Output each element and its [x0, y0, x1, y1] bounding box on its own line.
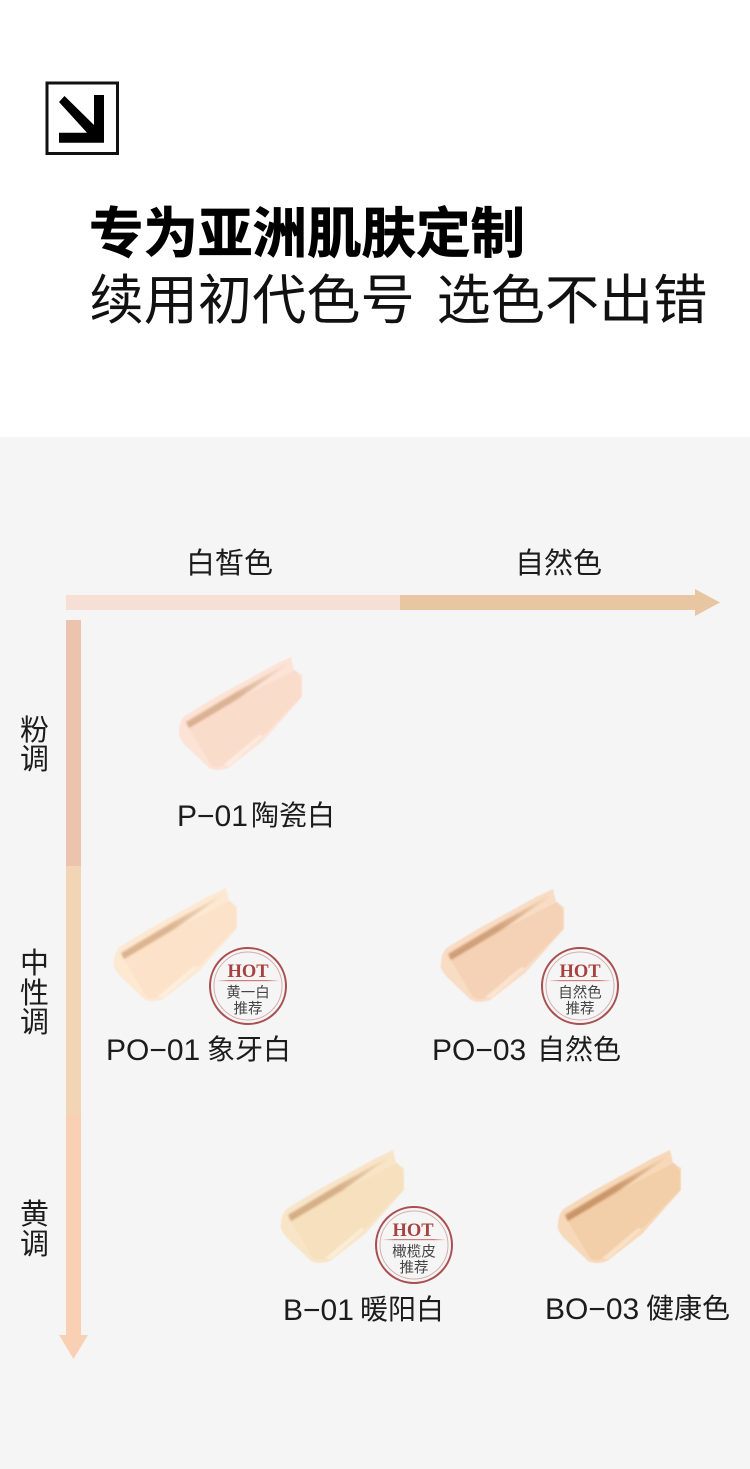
- icon: arrow in square: [47, 83, 118, 154]
- swatch: PO-03: [441, 889, 564, 1002]
- vertical axis label: 中性调: [20, 940, 49, 1041]
- label: B-01暖阳白: B−01: [283, 1294, 354, 1327]
- vertical axis label: 中性调: 性: [20, 970, 49, 1012]
- label: B-01暖阳白: 暖阳白: [360, 1288, 444, 1328]
- badge: HOT 黄一白推荐: 黄一白: [226, 982, 270, 1002]
- badge: HOT 自然色推荐: HOT: [559, 962, 601, 982]
- vertical axis label: 粉调: 调: [20, 736, 49, 778]
- label: BO-03健康色: [545, 1287, 730, 1327]
- badge: HOT 黄一白推荐: 推荐: [234, 998, 262, 1018]
- label: P-01陶瓷白: P−01: [177, 800, 248, 833]
- label: PO-03 自然色: 自然色: [537, 1028, 621, 1068]
- label: PO-01 象牙白: 象牙白: [207, 1028, 291, 1068]
- label: BO-03健康色: 健康色: [646, 1287, 730, 1327]
- badge: HOT 橄榄皮推荐: 橄榄皮: [392, 1240, 436, 1262]
- title: 选色不出错: [436, 256, 707, 335]
- badge: HOT 黄一白推荐: HOT: [227, 962, 269, 982]
- label: PO-01 象牙白: PO−01: [106, 1034, 200, 1067]
- badge: HOT 自然色推荐: 自然色: [558, 982, 602, 1002]
- label: PO-03 自然色: [432, 1028, 621, 1068]
- vertical axis label: 粉调: [20, 707, 49, 778]
- title: [89, 190, 707, 335]
- label: PO-03 自然色: PO−03: [432, 1034, 526, 1067]
- label: PO-01 象牙白: [106, 1028, 291, 1068]
- label: P-01陶瓷白: 陶瓷白: [251, 794, 335, 834]
- label: B-01暖阳白: [283, 1288, 444, 1328]
- vertical axis label: 黄调: [20, 1191, 49, 1263]
- badge: HOT 黄一白推荐: [210, 948, 286, 1024]
- badge: HOT 橄榄皮推荐: 推荐: [400, 1256, 428, 1278]
- title: 专为亚洲肌肤定制: [89, 190, 525, 268]
- label: P-01陶瓷白: [177, 794, 335, 834]
- lower panel background: [0, 437, 750, 1469]
- horizontal axis label: 白皙色: 白皙色: [186, 540, 273, 582]
- arrow: horizontal axis: [66, 589, 720, 616]
- vertical axis label: 中性调: 调: [20, 999, 49, 1041]
- swatch: BO-03: [558, 1150, 681, 1263]
- arrow: vertical axis: [59, 620, 88, 1359]
- badge: HOT 橄榄皮推荐: HOT: [392, 1221, 434, 1241]
- vertical axis label: 粉调: 粉: [20, 707, 49, 749]
- vertical axis label: 黄调: 黄: [20, 1191, 49, 1233]
- badge: HOT 橄榄皮推荐: [376, 1207, 452, 1283]
- top white background: [0, 0, 750, 437]
- vertical axis label: 中性调: 中: [20, 940, 49, 982]
- badge: HOT 自然色推荐: [542, 948, 618, 1024]
- swatch: B-01: [281, 1150, 404, 1263]
- title: 续用初代色号: [90, 256, 415, 335]
- badge: HOT 自然色推荐: 推荐: [566, 998, 594, 1018]
- label: BO-03健康色: BO−03: [545, 1293, 639, 1326]
- vertical axis label: 黄调: 调: [20, 1221, 49, 1263]
- horizontal axis label: 自然色: 自然色: [515, 540, 602, 582]
- swatch: PO-01: [114, 888, 237, 1001]
- swatch: P-01: [179, 657, 302, 770]
